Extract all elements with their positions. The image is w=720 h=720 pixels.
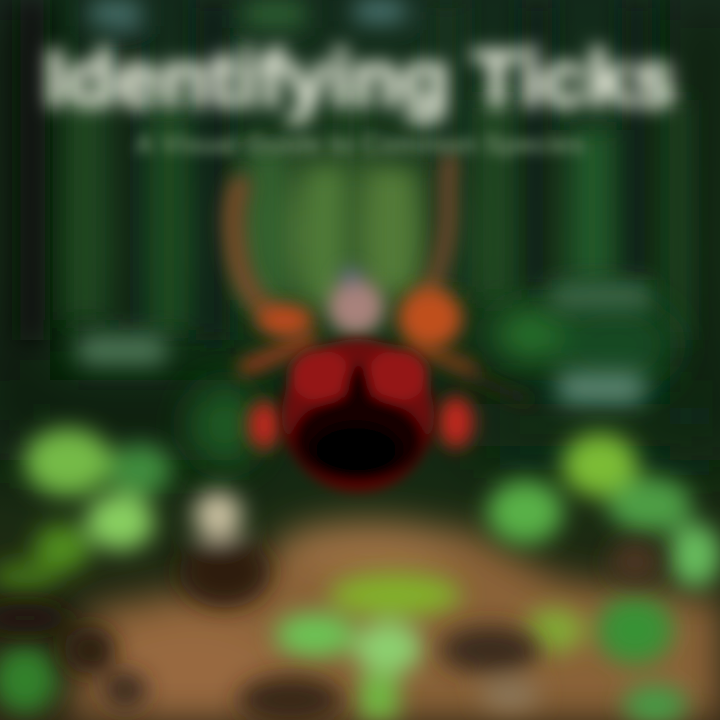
side label: right top (550, 284, 652, 308)
tick long front legs (233, 160, 450, 325)
ground and leaves (0, 428, 720, 720)
leaves: right cluster (487, 433, 720, 720)
tick head (328, 267, 384, 335)
tick abdomen (282, 339, 434, 491)
midground foliage (189, 300, 675, 465)
tick side legs (245, 340, 530, 400)
side label: left (78, 335, 166, 365)
tree trunks (20, 0, 688, 340)
side label: right bottom (558, 372, 644, 404)
leaves: left cluster (0, 428, 172, 714)
icon: tick (233, 160, 530, 491)
title: Identifying Ticks (44, 34, 676, 123)
subtitle: A Visual Guide to Common Species (135, 129, 585, 159)
tick shoulders (248, 288, 474, 449)
dirt clumps and pebble (0, 491, 661, 720)
leaves: centre sprout (275, 573, 461, 720)
